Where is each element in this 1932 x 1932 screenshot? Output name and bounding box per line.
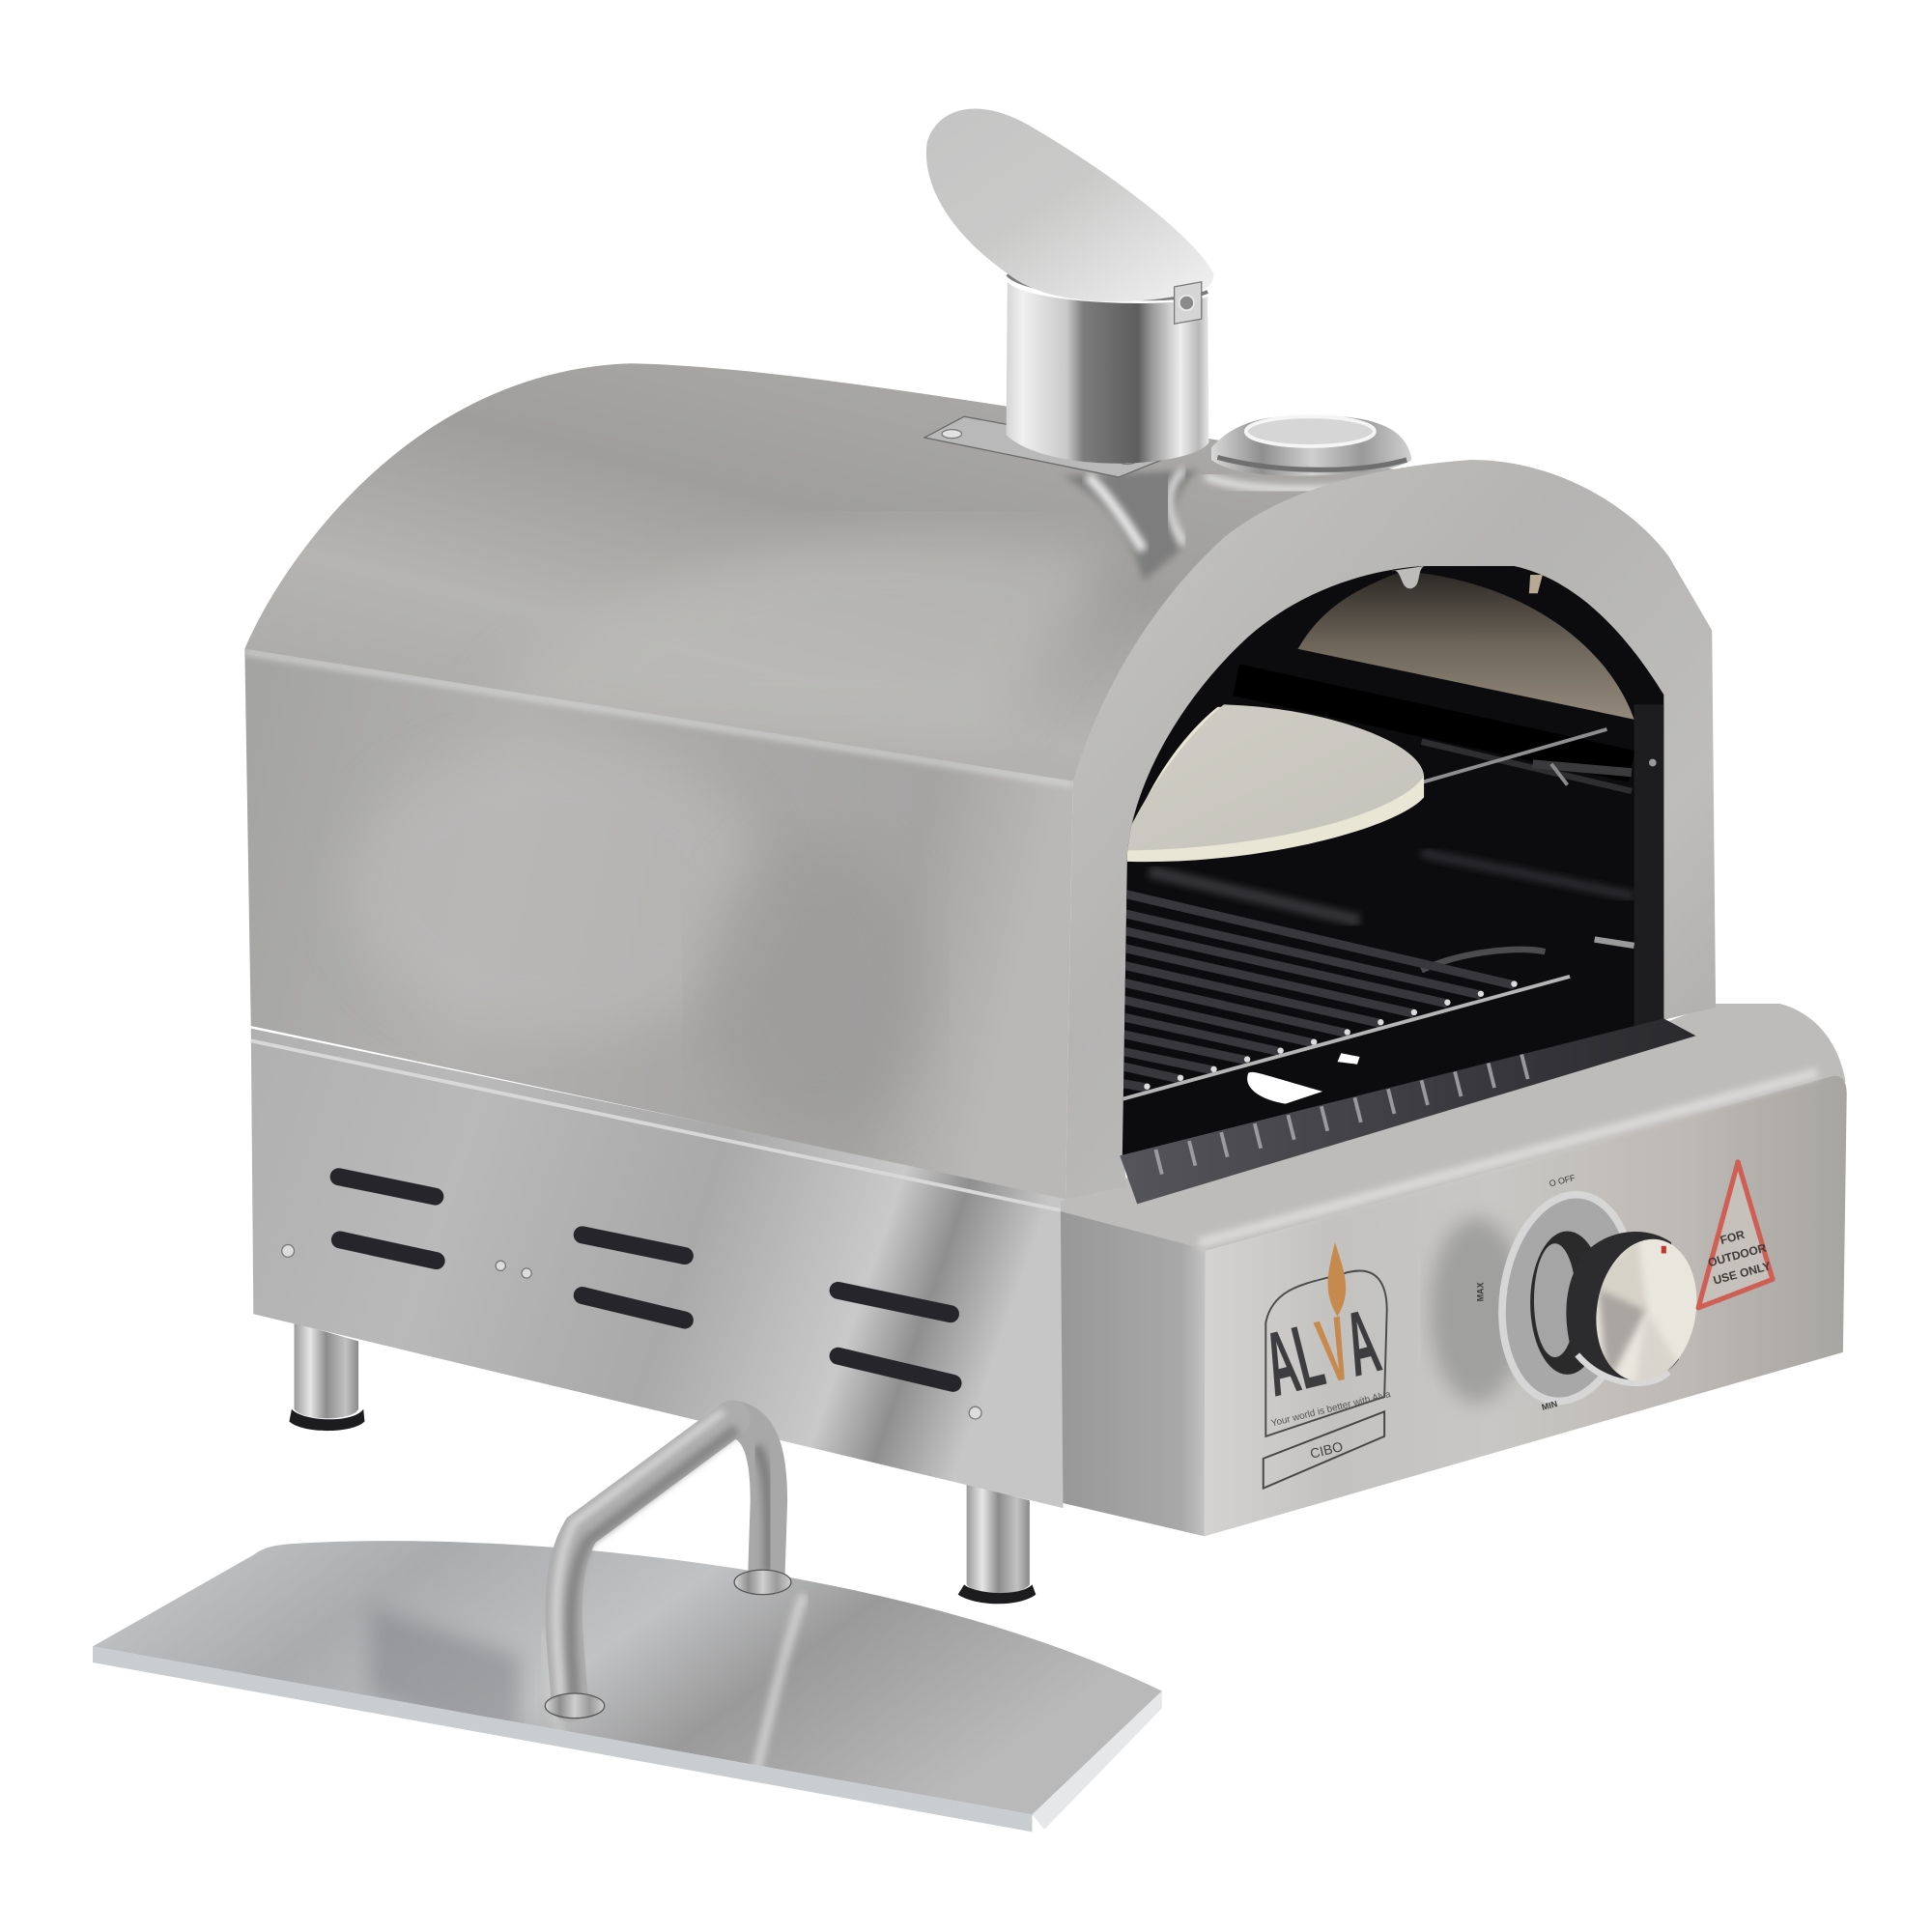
gauge top bbox=[1246, 416, 1375, 446]
pizza peel handle bbox=[545, 1411, 791, 1719]
model box bbox=[1264, 1411, 1384, 1489]
base top edge bbox=[251, 1040, 1065, 1211]
rod end caps bbox=[1144, 980, 1518, 1090]
gauge band bbox=[1217, 457, 1406, 469]
box side bbox=[1061, 1211, 1211, 1537]
tube highlight bbox=[556, 1411, 724, 1703]
grill rods bbox=[1119, 893, 1514, 1088]
pizza peel blade bbox=[93, 1541, 1162, 1832]
outdoor warning triangle bbox=[1698, 1162, 1773, 1308]
brushed metal wedges bbox=[1596, 1241, 1678, 1381]
side panel sheen bbox=[244, 651, 1073, 1137]
knob labels bbox=[1476, 1173, 1577, 1412]
gauge base bbox=[1211, 415, 1411, 476]
box front bbox=[1204, 1076, 1847, 1537]
handle tube rear bbox=[732, 1419, 769, 1576]
small pin bbox=[1529, 575, 1543, 593]
stone rim bbox=[1127, 707, 1424, 862]
outer dial ring bbox=[1490, 1186, 1645, 1409]
flue cap bbox=[926, 109, 1214, 301]
oven dome top bbox=[244, 363, 1434, 781]
tube shading bbox=[571, 1429, 737, 1703]
flame bbox=[1328, 1242, 1346, 1317]
knob labels: MIN bbox=[1541, 1399, 1558, 1412]
logo wordmark: ALVA bbox=[1255, 1292, 1389, 1416]
flue pipe bbox=[1007, 274, 1208, 464]
grill front bar bbox=[1119, 977, 1570, 1100]
notch in arch bbox=[1391, 566, 1424, 588]
warning text: OUTDOOR bbox=[1706, 1241, 1768, 1269]
rear tube shading bbox=[756, 1446, 769, 1573]
interior reflections bbox=[1422, 742, 1632, 791]
stone top bbox=[1119, 704, 1424, 853]
blade front edge bbox=[93, 1646, 1032, 1832]
triangle bbox=[1698, 1162, 1773, 1308]
warning text: USE ONLY bbox=[1712, 1259, 1772, 1288]
right inner strip bbox=[1634, 704, 1666, 1026]
neck chrome reflection bbox=[1534, 1243, 1576, 1357]
gap in tray showing white bbox=[1247, 1072, 1322, 1104]
Alva logo bbox=[1255, 1242, 1392, 1489]
pipe body bbox=[1007, 282, 1208, 464]
knob body bbox=[1566, 1232, 1679, 1380]
chrome base of knob bbox=[1577, 1354, 1668, 1383]
opening dark bbox=[1122, 566, 1663, 1155]
right foot bbox=[958, 1584, 1036, 1604]
left leg bbox=[295, 1322, 358, 1418]
box edge highlight bbox=[1199, 1073, 1817, 1243]
indicator bbox=[1662, 1246, 1666, 1254]
blade top bbox=[93, 1541, 1162, 1814]
cap bracket bbox=[1175, 282, 1202, 324]
pipe lip shadow bbox=[1008, 274, 1208, 298]
temperature gauge bbox=[1211, 415, 1411, 476]
burner highlights bbox=[1422, 950, 1545, 970]
plate screws bbox=[942, 430, 1137, 464]
oven opening and interior bbox=[1119, 566, 1666, 1155]
model label: CIBO bbox=[1309, 1438, 1345, 1462]
handle tube front bbox=[564, 1419, 732, 1703]
ferrule rear bbox=[734, 1570, 791, 1595]
vent slots bbox=[339, 1177, 953, 1383]
interior back wall bbox=[1298, 571, 1634, 720]
pizza stone bbox=[1119, 704, 1424, 862]
logo outline bbox=[1265, 1270, 1387, 1436]
rear legs and feet bbox=[289, 1322, 1036, 1604]
ribs bbox=[1155, 1054, 1528, 1175]
knob face bbox=[1585, 1231, 1708, 1389]
blade reflections bbox=[371, 1595, 804, 1780]
right leg bbox=[967, 1484, 1030, 1594]
arch front frame bbox=[1065, 460, 1716, 1199]
warning text: FOR bbox=[1719, 1228, 1747, 1247]
knob recess shadow bbox=[1430, 1217, 1524, 1403]
base panel bbox=[251, 1029, 1075, 1508]
rack rail bbox=[1422, 729, 1606, 782]
left foot bbox=[289, 1409, 364, 1431]
ribbed burner strip bbox=[1120, 1018, 1696, 1204]
box top bbox=[1061, 1004, 1845, 1259]
knob labels: O OFF bbox=[1548, 1173, 1577, 1188]
lower base housing with vents bbox=[251, 1029, 1075, 1508]
oven side panel bbox=[244, 649, 1073, 1199]
tagline: Your world is better with Alva bbox=[1270, 1389, 1392, 1430]
knob labels: MAX bbox=[1476, 1283, 1486, 1301]
strip bbox=[1120, 1018, 1696, 1204]
dome reflection bbox=[545, 466, 1339, 707]
burner control box bbox=[1061, 1004, 1847, 1537]
screws bbox=[282, 1245, 981, 1419]
gas control knob bbox=[1498, 1191, 1696, 1405]
blade right edge bbox=[1032, 1690, 1162, 1830]
ferrule front bbox=[545, 1693, 605, 1719]
flue pipe base plate bbox=[924, 416, 1175, 477]
warning text bbox=[1702, 1223, 1773, 1288]
neck bbox=[1530, 1231, 1605, 1375]
